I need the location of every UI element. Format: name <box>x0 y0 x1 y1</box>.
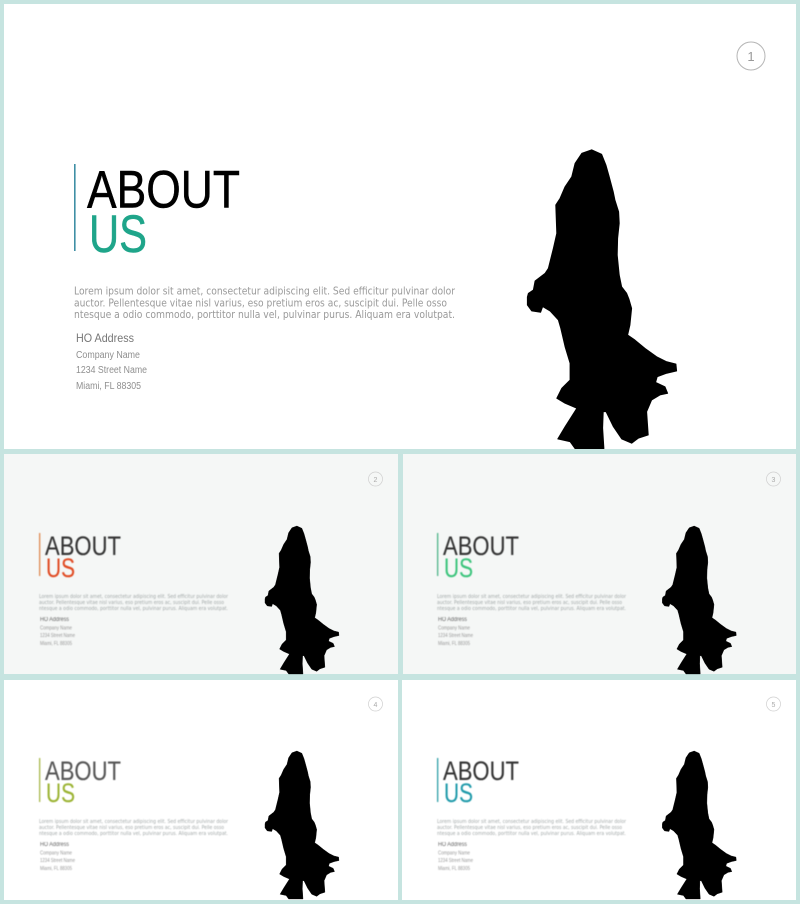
address block <box>438 617 473 647</box>
panel: slide 3 <box>403 454 796 674</box>
address block: 1234 Street Name <box>438 858 473 864</box>
slide 2 background <box>4 454 398 674</box>
body text <box>39 819 229 837</box>
heading: about us: ABOUT <box>87 160 240 220</box>
body text: Lorem ipsum dolor sit amet, consectetur adipiscing elit. Sed efficitur pulvinar dolor <box>437 819 627 825</box>
silhouette figure <box>265 751 339 899</box>
address block: HO Address <box>76 331 134 345</box>
heading: about us green: US <box>444 553 473 583</box>
address block <box>40 842 75 872</box>
panel: slide 1 (large) <box>4 4 796 449</box>
silhouette figure <box>662 751 736 899</box>
address block: HO Address <box>40 617 69 623</box>
silhouette figure <box>265 526 339 674</box>
heading: about us teal <box>437 756 519 808</box>
address block <box>40 617 75 647</box>
address block: 1234 Street Name <box>438 633 473 639</box>
page number badge 3: 3 <box>772 477 776 484</box>
body text: auctor. Pellentesque vitae nisl varius, eso pretium eros ac, suscipit dui. Pelle osso <box>39 600 224 606</box>
address block: Miami, FL 88305 <box>438 641 470 647</box>
body text: ntesque a odio commodo, porttitor nulla vel, pulvinar purus. Aliquam era volutpat. <box>437 606 626 612</box>
address block: Miami, FL 88305 <box>40 866 72 872</box>
body text: ntesque a odio commodo, porttitor nulla vel, pulvinar purus. Aliquam era volutpat. <box>39 606 228 612</box>
page number badge 4 <box>368 697 382 711</box>
address block: Miami, FL 88305 <box>76 381 141 392</box>
heading: about us teal: US <box>444 778 473 808</box>
panel: slide 4 <box>4 680 398 900</box>
heading: about us green: ABOUT <box>443 531 519 561</box>
page number badge 2 <box>368 472 382 486</box>
address block: Company Name <box>40 626 72 632</box>
body text: Lorem ipsum dolor sit amet, consectetur adipiscing elit. Sed efficitur pulvinar dolor <box>39 594 229 600</box>
heading: about us orange: US <box>46 553 75 583</box>
heading: about us olive: ABOUT <box>45 756 121 786</box>
address block: Miami, FL 88305 <box>438 866 470 872</box>
slide 3 background <box>403 454 796 674</box>
page number badge 2: 2 <box>374 477 378 484</box>
body text <box>437 819 627 837</box>
body text: ntesque a odio commodo, porttitor nulla vel, pulvinar purus. Aliquam era volutpat. <box>74 308 455 321</box>
page number badge 1: 1 <box>747 49 755 64</box>
address block: HO Address <box>40 842 69 848</box>
body text <box>437 594 627 612</box>
heading: about us <box>74 160 240 264</box>
address block: Company Name <box>438 850 470 856</box>
heading: about us green <box>437 531 519 583</box>
heading: about us: US <box>89 205 147 264</box>
heading: about us olive: US <box>46 778 75 808</box>
page number badge 5 <box>766 697 780 711</box>
panel: slide 2 <box>4 454 398 674</box>
heading: about us teal: ABOUT <box>443 756 519 786</box>
body text: auctor. Pellentesque vitae nisl varius, eso pretium eros ac, suscipit dui. Pelle osso <box>437 600 622 606</box>
slide 1 background <box>4 4 796 449</box>
body text <box>39 594 229 612</box>
address block <box>438 842 473 872</box>
slide 5 background <box>402 680 796 900</box>
body text: ntesque a odio commodo, porttitor nulla vel, pulvinar purus. Aliquam era volutpat. <box>39 831 228 837</box>
body text: Lorem ipsum dolor sit amet, consectetur adipiscing elit. Sed efficitur pulvinar dolor <box>39 819 229 825</box>
body text: ntesque a odio commodo, porttitor nulla vel, pulvinar purus. Aliquam era volutpat. <box>437 831 626 837</box>
body text: Lorem ipsum dolor sit amet, consectetur adipiscing elit. Sed efficitur pulvinar dolor <box>74 284 455 298</box>
address block <box>76 331 147 392</box>
heading: about us orange: ABOUT <box>45 531 121 561</box>
page number badge 4: 4 <box>374 702 378 709</box>
slide 4 background <box>4 680 398 900</box>
address block: HO Address <box>438 842 467 848</box>
page number badge 3 <box>766 472 780 486</box>
address block: 1234 Street Name <box>40 633 75 639</box>
address block: 1234 Street Name <box>40 858 75 864</box>
address block: Miami, FL 88305 <box>40 641 72 647</box>
body text: auctor. Pellentesque vitae nisl varius, eso pretium eros ac, suscipit dui. Pelle osso <box>39 825 224 831</box>
body text: auctor. Pellentesque vitae nisl varius, eso pretium eros ac, suscipit dui. Pelle osso <box>437 825 622 831</box>
address block: Company Name <box>40 850 72 856</box>
body text: Lorem ipsum dolor sit amet, consectetur adipiscing elit. Sed efficitur pulvinar dolor <box>437 594 627 600</box>
page number badge 5: 5 <box>772 702 776 709</box>
body text <box>74 284 455 321</box>
address block: Company Name <box>438 626 470 632</box>
address block: 1234 Street Name <box>76 365 147 376</box>
heading: about us olive <box>39 756 121 808</box>
address block: Company Name <box>76 350 140 361</box>
panel: slide 5 <box>402 680 796 900</box>
silhouette figure <box>662 526 736 674</box>
page number badge 1 <box>737 42 765 70</box>
body text: auctor. Pellentesque vitae nisl varius, eso pretium eros ac, suscipit dui. Pelle osso <box>74 296 447 310</box>
address block: HO Address <box>438 617 467 623</box>
silhouette figure <box>527 150 677 449</box>
heading: about us orange <box>39 531 121 583</box>
